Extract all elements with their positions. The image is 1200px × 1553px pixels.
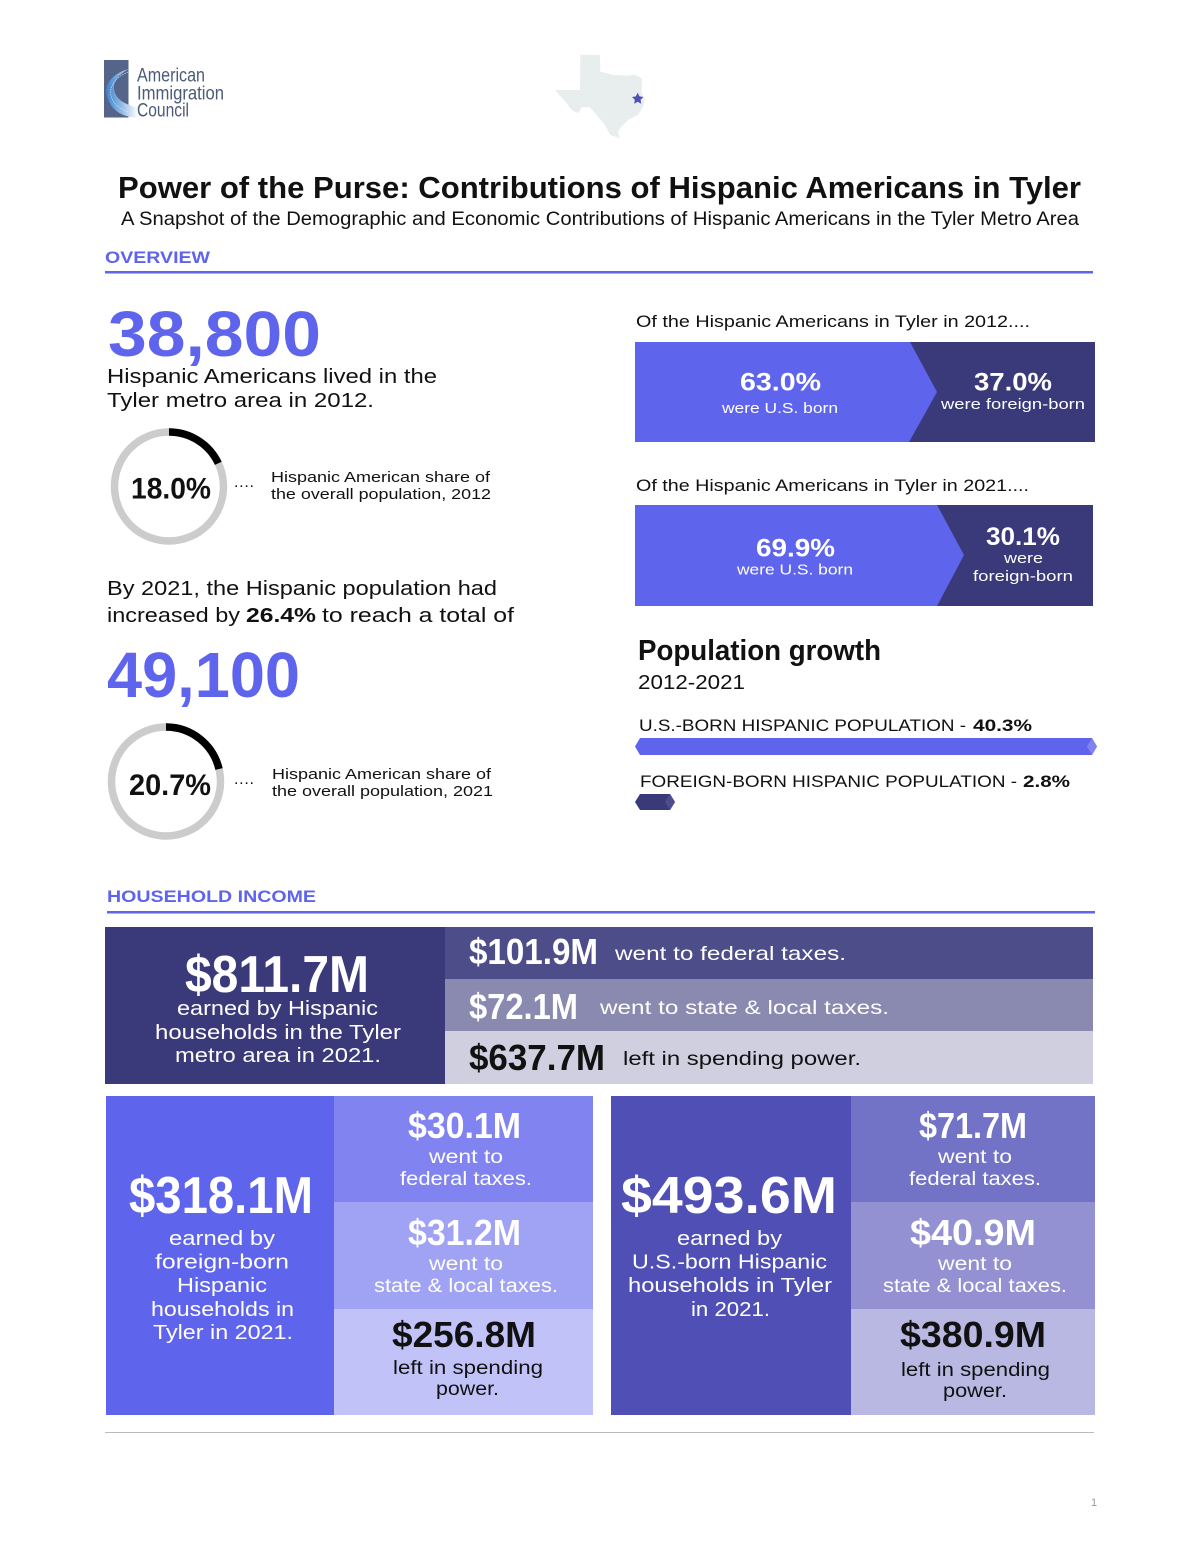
- text: U.S.-born caption: [628, 1227, 832, 1321]
- cell: federal taxes: federal taxes.: [909, 1169, 1041, 1190]
- donut chart: 18.0% share 2012: 18.0%: [131, 472, 211, 506]
- cell: spending power: $380.9M: [900, 1314, 1046, 1355]
- text: growth by 2021: increased by: [107, 604, 241, 627]
- text: total income caption: households in the Tyler: [155, 1021, 401, 1044]
- heading: 2012 split: Of the Hispanic Americans in Tyler in 2012....: [636, 312, 1030, 331]
- text: growth by 2021: By 2021, the Hispanic population had: [107, 577, 497, 600]
- text: period: 2012-2021: [638, 671, 745, 694]
- bar: 2012 split: were foreign-born: [940, 396, 1085, 413]
- text: foreign-born caption: foreign-born: [155, 1250, 289, 1274]
- panel: U.S.-born households: [611, 1096, 1095, 1415]
- logo: American Immigration Council: Immigration: [137, 84, 224, 104]
- cell: federal taxes: federal taxes.: [400, 1169, 532, 1190]
- bar: 2012 split: 63.0%: [740, 368, 821, 396]
- stat: foreign-born income: $318.1M: [129, 1167, 313, 1225]
- panel: foreign-born households: [106, 1096, 593, 1415]
- page number: 1: [1091, 1497, 1097, 1509]
- text: share caption 2021: the overall population, 2021: [272, 783, 493, 800]
- text: growth by 2021: [107, 577, 514, 627]
- bar: U.S.-born growth: [635, 738, 1097, 755]
- cell: federal taxes: went to: [937, 1147, 1012, 1168]
- connector dots: ....: [234, 771, 254, 788]
- panel: population growth: [635, 635, 1097, 810]
- row: state and local taxes: [445, 979, 1093, 1031]
- text: growth by 2021: to reach a total of: [322, 604, 514, 627]
- text: 2012 population description: [107, 365, 437, 412]
- text: growth by 2021: 26.4%: [246, 604, 316, 627]
- cell: federal taxes: [334, 1096, 593, 1202]
- label: U.S.-born growth: 40.3%: [973, 716, 1032, 735]
- text: total income caption: [155, 997, 401, 1067]
- connector dots: ....: [234, 474, 254, 491]
- row: spending power: $637.7M: [469, 1037, 605, 1078]
- cell: state and local taxes: [334, 1202, 593, 1309]
- stat: U.S.-born income: $493.6M: [621, 1167, 837, 1225]
- bar: 2021 split: 30.1%: [986, 523, 1060, 551]
- row: state and local taxes: went to state & local taxes.: [599, 997, 889, 1019]
- cell: state and local taxes: [851, 1202, 1095, 1309]
- cell: state and local taxes: $31.2M: [408, 1212, 521, 1253]
- text: U.S.-born caption: U.S.-born Hispanic: [632, 1250, 827, 1274]
- donut chart: 20.7% share 2021: [112, 727, 220, 836]
- row: spending power: left in spending power.: [623, 1048, 861, 1070]
- cell: federal taxes: [851, 1096, 1095, 1202]
- cell: federal taxes: went to: [428, 1147, 503, 1168]
- heading: population growth: Population growth: [638, 635, 881, 667]
- logo: American Immigration Council: [104, 60, 224, 122]
- cell: federal taxes: $71.7M: [919, 1105, 1027, 1146]
- cell: spending power: left in spending: [901, 1359, 1050, 1381]
- stat: 38,800: 38,800: [108, 298, 321, 370]
- stat: 49,100: 49,100: [107, 639, 300, 711]
- cell: state and local taxes: state & local taxes.: [883, 1276, 1067, 1297]
- text: foreign-born caption: Tyler in 2021.: [153, 1321, 293, 1344]
- text: share caption 2021: [272, 766, 493, 800]
- bar: 2021 split: were U.S. born: [736, 562, 853, 578]
- text: foreign-born caption: households in: [151, 1298, 294, 1321]
- logo: American Immigration Council: American: [137, 66, 205, 86]
- label: foreign-born growth: 2.8%: [1023, 772, 1070, 791]
- heading: 2021 split: Of the Hispanic Americans in Tyler in 2021....: [636, 476, 1029, 495]
- row: federal taxes: went to federal taxes.: [614, 943, 846, 965]
- text: 2012 population description: Tyler metro area in 2012.: [107, 389, 374, 412]
- label: foreign-born growth: FOREIGN-BORN HISPANIC POPULATION -: [640, 772, 1017, 791]
- cell: state and local taxes: went to: [937, 1254, 1012, 1275]
- bar: 2021 split: [635, 505, 1093, 606]
- cell: spending power: power.: [436, 1378, 499, 1400]
- text: total income caption: earned by Hispanic: [177, 997, 378, 1020]
- subtitle: A Snapshot of the Demographic and Economic Contributions of Hispanic Americans in the Tyler Metro Area: [121, 208, 1079, 230]
- bar: 2021 split: were: [1003, 550, 1043, 567]
- icon: Texas map with star: [555, 55, 645, 138]
- bar: 2012 split: were U.S. born: [721, 400, 838, 417]
- cell: spending power: left in spending: [393, 1357, 543, 1379]
- text: U.S.-born caption: households in Tyler: [628, 1274, 832, 1297]
- bar: 2021 split: 69.9%: [756, 534, 835, 562]
- bar: 2012 split: 37.0%: [974, 368, 1052, 396]
- text: total income caption: metro area in 2021.: [175, 1044, 381, 1067]
- text: share caption 2021: Hispanic American share of: [272, 766, 492, 783]
- panel: population overview: [107, 298, 514, 836]
- stat: total income: $811.7M: [185, 946, 369, 1004]
- cell: state and local taxes: state & local taxes.: [374, 1276, 558, 1297]
- donut chart: 20.7% share 2021: 20.7%: [129, 769, 211, 802]
- heading: overview: OVERVIEW: [105, 248, 211, 267]
- label: U.S.-born growth: U.S.-BORN HISPANIC POPULATION -: [639, 716, 966, 735]
- text: 2012 population description: Hispanic Americans lived in the: [107, 365, 437, 388]
- text: U.S.-born caption: earned by: [677, 1227, 783, 1250]
- panel: nativity split 2021: [635, 476, 1093, 606]
- text: foreign-born caption: earned by: [169, 1227, 276, 1250]
- heading: household income: HOUSEHOLD INCOME: [107, 887, 316, 906]
- cell: spending power: [334, 1309, 593, 1415]
- row: state and local taxes: $72.1M: [469, 986, 578, 1027]
- row: spending power: [445, 1031, 1093, 1084]
- panel: nativity split 2012: [635, 312, 1095, 442]
- bar: 2012 split: [635, 342, 1095, 442]
- text: foreign-born caption: Hispanic: [177, 1274, 267, 1297]
- text: share caption 2012: the overall population, 2012: [271, 486, 491, 503]
- logo: American Immigration Council: Council: [137, 100, 189, 122]
- row: federal taxes: [445, 927, 1093, 979]
- text: share caption 2012: [271, 469, 491, 503]
- cell: federal taxes: $30.1M: [408, 1105, 521, 1146]
- row: federal taxes: $101.9M: [469, 931, 598, 972]
- cell: spending power: $256.8M: [392, 1314, 536, 1355]
- cell: spending power: [851, 1309, 1095, 1415]
- cell: state and local taxes: $40.9M: [910, 1212, 1036, 1253]
- cell: state and local taxes: went to: [428, 1254, 503, 1275]
- cell: spending power: power.: [943, 1380, 1007, 1402]
- panel: total household income: [105, 927, 1093, 1084]
- text: share caption 2012: Hispanic American share of: [271, 469, 491, 486]
- title: Power of the Purse: Contributions of Hispanic Americans in Tyler: [118, 170, 1081, 205]
- bar: 2021 split: foreign-born: [973, 568, 1073, 585]
- bar: foreign-born growth: [635, 794, 675, 810]
- donut chart: 18.0% share 2012: [114, 432, 224, 541]
- text: foreign-born caption: [151, 1227, 294, 1344]
- text: U.S.-born caption: in 2021.: [691, 1298, 770, 1321]
